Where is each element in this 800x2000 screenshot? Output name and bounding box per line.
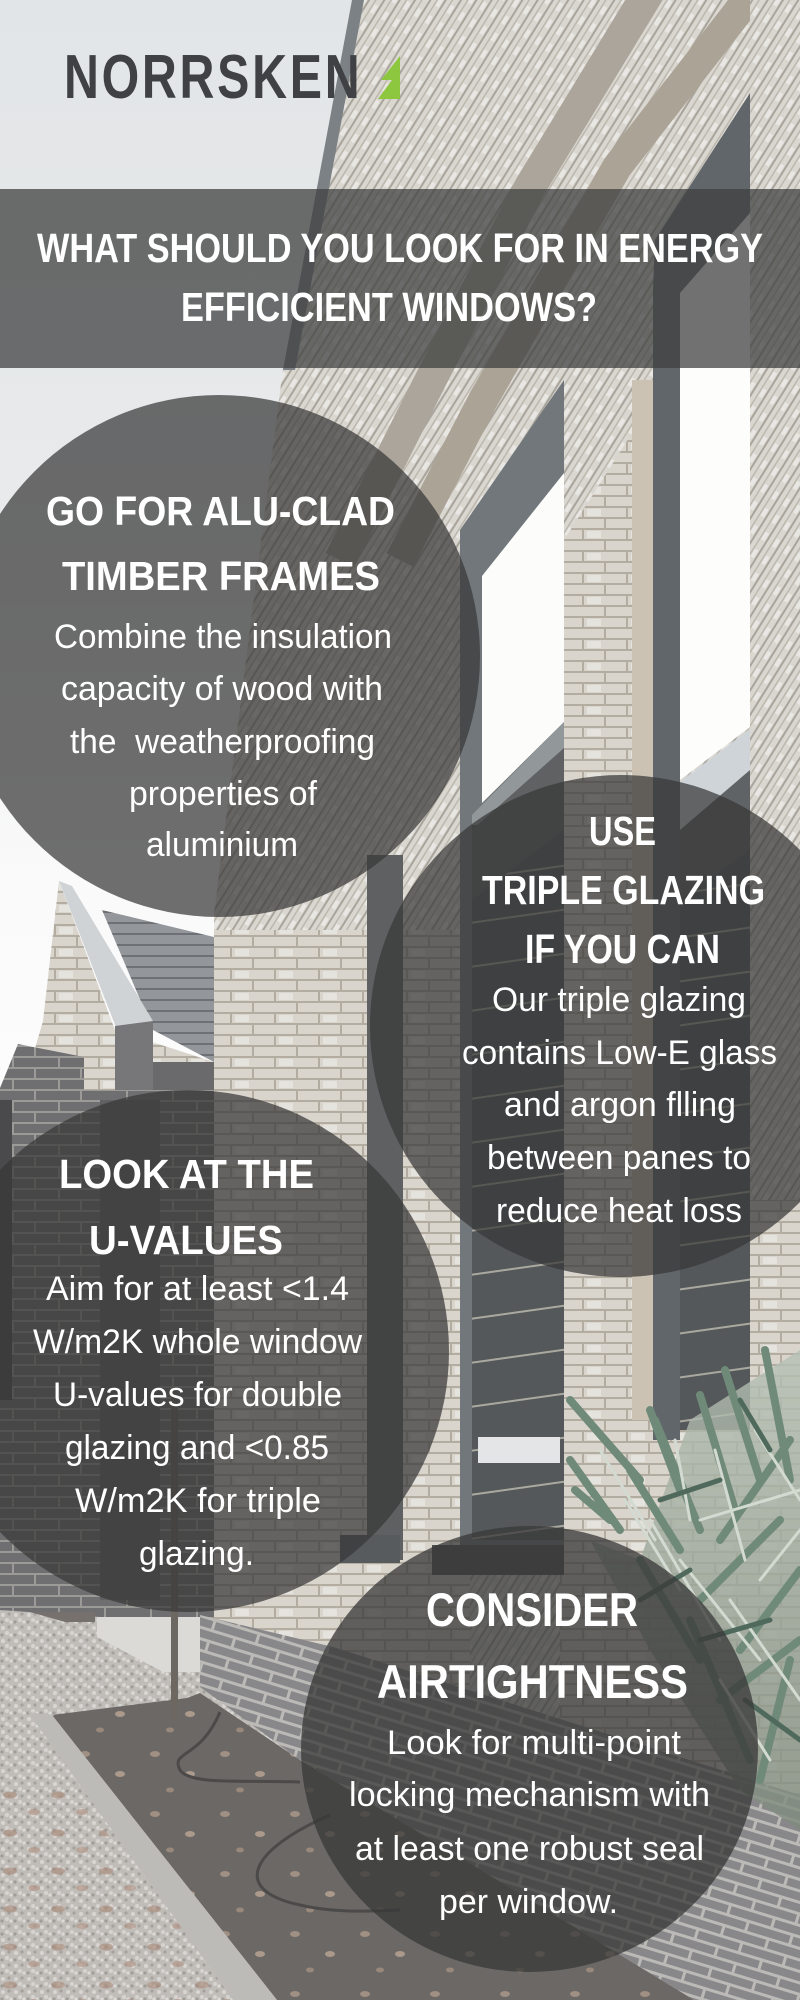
body: airtightness: per window. bbox=[439, 1883, 618, 1921]
logo wordmark: NORRSKEN bbox=[64, 42, 360, 111]
body: triple glazing: reduce heat loss bbox=[496, 1192, 742, 1230]
window left column frame and glass bbox=[460, 380, 564, 1560]
body: alu-clad: the weatherproofing bbox=[70, 723, 375, 761]
dark brick lower left building bbox=[0, 1090, 214, 1620]
body: u-values: W/m2K whole window bbox=[33, 1323, 362, 1361]
panel: triple glazing bbox=[370, 775, 800, 1277]
body: u-values: glazing and <0.85 bbox=[65, 1429, 329, 1467]
title band bbox=[0, 189, 800, 368]
body: alu-clad: capacity of wood with bbox=[61, 670, 383, 708]
small tree trunk bbox=[171, 1390, 178, 1720]
dark brick plinth bbox=[200, 1615, 800, 2000]
logo icon: green shard bbox=[378, 56, 400, 99]
body: airtightness: Look for multi-point bbox=[387, 1724, 681, 1762]
small gabled house in background bbox=[0, 881, 214, 1110]
ground gravel bbox=[0, 1610, 800, 2000]
body: u-values: Aim for at least <1.4 bbox=[46, 1270, 349, 1308]
logo: Norrsken bbox=[64, 42, 400, 111]
right brick column bbox=[750, 0, 800, 1400]
irrigation hoses bbox=[178, 1712, 400, 1911]
body: triple glazing: Our triple glazing bbox=[492, 981, 746, 1019]
body: airtightness: at least one robust seal bbox=[355, 1830, 704, 1868]
heading: u-values: LOOK AT THE bbox=[59, 1151, 314, 1197]
concrete step bbox=[97, 1617, 200, 1672]
body: u-values bbox=[33, 1270, 362, 1573]
body: alu-clad: Combine the insulation bbox=[54, 618, 392, 656]
small dark bed at the wall foot bbox=[30, 1612, 95, 1622]
heading: alu-clad: GO FOR ALU-CLAD bbox=[46, 488, 395, 534]
body: u-values: U-values for double bbox=[53, 1376, 342, 1414]
window centre narrow dark strip bbox=[367, 855, 403, 1560]
body: triple glazing: and argon flling bbox=[504, 1086, 736, 1124]
heading: alu-clad: TIMBER FRAMES bbox=[62, 553, 380, 599]
title text bbox=[37, 225, 763, 330]
panel: airtightness bbox=[301, 1526, 758, 1972]
panel: u-values bbox=[0, 1090, 449, 1612]
body: u-values: W/m2K for triple bbox=[75, 1482, 321, 1520]
heading: airtightness: AIRTIGHTNESS bbox=[377, 1655, 688, 1708]
body: alu-clad: properties of bbox=[129, 775, 317, 813]
kerb bbox=[28, 1712, 277, 2000]
olive shrub bbox=[570, 1350, 800, 1830]
heading: u-values bbox=[59, 1151, 314, 1263]
brick arch bands bbox=[340, 0, 650, 560]
heading: alu-clad bbox=[46, 488, 395, 599]
body: triple glazing bbox=[462, 981, 777, 1230]
body: alu-clad bbox=[54, 618, 392, 864]
body: airtightness bbox=[349, 1724, 710, 1921]
sky bbox=[0, 0, 800, 1100]
body: triple glazing: contains Low-E glass bbox=[462, 1034, 777, 1072]
mulch flower bed bbox=[52, 1693, 694, 2000]
body: airtightness: locking mechanism with bbox=[349, 1776, 710, 1814]
heading: airtightness: CONSIDER bbox=[426, 1583, 638, 1636]
heading: u-values: U-VALUES bbox=[89, 1217, 283, 1263]
heading: triple glazing: IF YOU CAN bbox=[525, 926, 720, 972]
body: triple glazing: between panes to bbox=[487, 1139, 751, 1177]
title text: EFFICICIENT WINDOWS? bbox=[181, 284, 597, 330]
heading: triple glazing: USE bbox=[589, 808, 656, 854]
body: u-values: glazing. bbox=[139, 1535, 254, 1573]
main brick wall bbox=[214, 0, 800, 1830]
heading: airtightness bbox=[377, 1583, 688, 1708]
window right column frame and glass bbox=[653, 93, 750, 1440]
body: alu-clad: aluminium bbox=[146, 826, 298, 864]
heading: triple glazing bbox=[482, 808, 765, 972]
brick pier between windows bbox=[564, 400, 653, 1560]
panel: alu-clad timber frames bbox=[0, 395, 480, 917]
